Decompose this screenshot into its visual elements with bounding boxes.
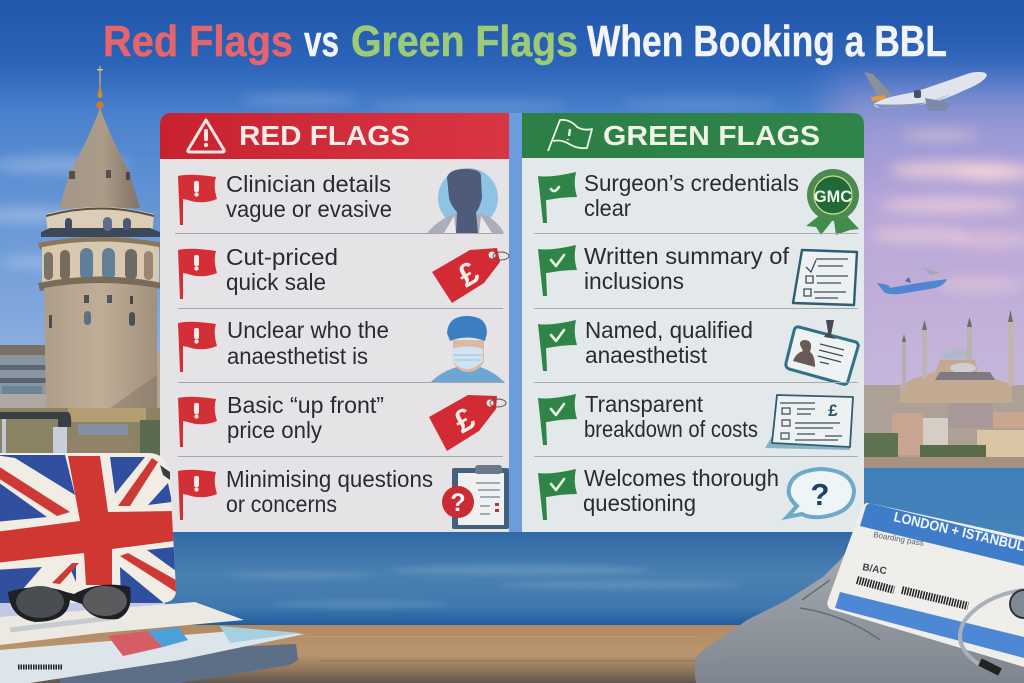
text: anaesthetist bbox=[585, 342, 708, 368]
green panel body bbox=[522, 150, 864, 532]
text: clear bbox=[584, 195, 631, 221]
icon: cost breakdown card bbox=[765, 395, 853, 450]
red panel body bbox=[160, 150, 509, 532]
title bbox=[103, 17, 947, 66]
icon: boarding pass bbox=[827, 503, 1024, 667]
suitcase side latch bbox=[160, 465, 170, 480]
text: Written summary of bbox=[584, 243, 790, 269]
icon: red flag bbox=[178, 249, 217, 299]
text bbox=[226, 466, 433, 517]
row divider bbox=[175, 233, 503, 234]
row: written summary bbox=[538, 243, 857, 305]
text bbox=[584, 391, 758, 442]
icon: sunglasses bbox=[8, 585, 131, 622]
row divider bbox=[534, 456, 858, 457]
scenery: left hillside buildings bbox=[0, 345, 162, 458]
text: Welcomes thorough bbox=[584, 465, 779, 491]
icon: red flag bbox=[178, 397, 217, 447]
tower window drum bbox=[42, 242, 159, 283]
tower cone roof bbox=[59, 108, 140, 208]
icon: green flag bbox=[538, 469, 577, 520]
text: quick sale bbox=[226, 269, 326, 295]
text: price only bbox=[227, 417, 322, 443]
row: minimising questions bbox=[178, 465, 509, 529]
panel gap strip bbox=[505, 113, 527, 532]
icon: GMC badge bbox=[806, 169, 859, 235]
text: Basic “up front” bbox=[227, 392, 384, 418]
table top bbox=[0, 625, 1024, 683]
icon: clipboard with question bbox=[442, 465, 509, 529]
icon: outline flag bbox=[548, 120, 592, 151]
icon: speech bubble bbox=[787, 469, 854, 517]
text: breakdown of costs bbox=[584, 416, 758, 442]
icon: red flag bbox=[178, 470, 217, 520]
background: right sea bbox=[860, 468, 1024, 628]
icon: price tag bbox=[432, 248, 509, 303]
text: anaesthetist is bbox=[227, 343, 368, 369]
text: Clinician details bbox=[226, 171, 391, 197]
icon: Union Jack suitcase bbox=[0, 412, 180, 605]
text: Transparent bbox=[585, 391, 704, 417]
text bbox=[585, 317, 753, 368]
row divider bbox=[534, 233, 858, 234]
icon: denim jeans bbox=[695, 540, 1024, 683]
boarding pass footer band bbox=[835, 592, 1024, 658]
icon: big plane bbox=[864, 72, 987, 111]
suitcase body bbox=[0, 450, 180, 605]
icon: Galata tower bbox=[38, 66, 163, 408]
skyline mosque bbox=[900, 310, 1014, 403]
red panel header bbox=[160, 113, 509, 159]
icon: stacked tickets bbox=[0, 602, 305, 683]
icon: cost breakdown card: £ bbox=[828, 401, 838, 420]
row: welcomes questioning bbox=[538, 465, 854, 520]
text: inclusions bbox=[584, 268, 684, 294]
text: or concerns bbox=[226, 491, 337, 517]
icon: red flag bbox=[178, 322, 217, 372]
icon: green flag bbox=[538, 245, 577, 296]
text: Unclear who the bbox=[227, 317, 389, 343]
icon: masked anaesthetist bbox=[430, 316, 505, 383]
row divider bbox=[178, 456, 503, 457]
icon: GMC badge: GMC bbox=[814, 187, 852, 206]
background: central sea bbox=[165, 532, 865, 626]
icon: clipboard with question: ? bbox=[450, 489, 466, 517]
icon: green flag bbox=[538, 320, 577, 371]
row: surgeon credentials bbox=[538, 169, 859, 235]
row: named anaesthetist bbox=[538, 317, 858, 384]
skyline city blocks bbox=[862, 385, 1024, 468]
row: clinician details bbox=[178, 168, 504, 233]
icon: anonymous clinician bbox=[427, 168, 504, 233]
text bbox=[584, 243, 790, 294]
tower upper gallery bbox=[38, 207, 163, 249]
text bbox=[226, 171, 392, 222]
icon: price tag: £ bbox=[452, 254, 485, 294]
icon: Istanbul skyline bbox=[862, 310, 1024, 468]
icon: small plane bbox=[877, 267, 947, 294]
panel: green flags bbox=[522, 113, 864, 532]
green heading: GREEN FLAGS bbox=[603, 120, 820, 151]
text bbox=[584, 170, 799, 221]
icon: warning triangle bbox=[188, 120, 224, 152]
green panel header bbox=[522, 113, 864, 158]
row divider bbox=[534, 308, 858, 309]
icon: boarding pass: B/AC bbox=[861, 562, 887, 577]
tower stone base bbox=[44, 283, 157, 408]
title: Green Flags bbox=[351, 17, 578, 66]
text: vague or evasive bbox=[226, 196, 392, 222]
title: When Booking a BBL bbox=[587, 17, 947, 66]
title: Red Flags bbox=[103, 17, 293, 66]
text bbox=[226, 244, 338, 295]
icon: red flag bbox=[178, 175, 217, 225]
row divider bbox=[178, 382, 503, 383]
text bbox=[583, 465, 779, 516]
title: vs bbox=[304, 17, 339, 66]
icon: ID card bbox=[786, 320, 858, 384]
tower finial bbox=[96, 66, 104, 109]
text bbox=[227, 317, 389, 369]
panel: red flags bbox=[160, 113, 509, 532]
icon: checklist bbox=[793, 250, 857, 305]
icon: green flag bbox=[538, 172, 577, 223]
text: Named, qualified bbox=[585, 317, 753, 343]
row divider bbox=[534, 382, 858, 383]
boarding pass header band bbox=[860, 503, 1024, 566]
row: cut-priced bbox=[178, 244, 509, 303]
text: questioning bbox=[583, 490, 696, 516]
icon: price tag bbox=[429, 395, 506, 451]
suitcase handle bbox=[0, 412, 71, 455]
text: Cut-priced bbox=[226, 244, 338, 270]
icon: green flag bbox=[538, 394, 577, 445]
row: unclear anaesthetist bbox=[178, 316, 505, 383]
tower lower cornice bbox=[38, 276, 162, 291]
row divider bbox=[178, 308, 503, 309]
text: Minimising questions bbox=[226, 466, 433, 492]
text bbox=[227, 392, 384, 443]
icon: speech bubble: ? bbox=[811, 477, 829, 512]
row: basic price bbox=[178, 392, 506, 451]
row: transparent breakdown bbox=[538, 391, 853, 450]
text: Surgeon’s credentials bbox=[584, 170, 799, 196]
icon: boarding pass: Boarding pass bbox=[873, 530, 925, 548]
icon: stethoscope bbox=[960, 590, 1024, 672]
red heading: RED FLAGS bbox=[239, 120, 410, 151]
icon: price tag: £ bbox=[448, 400, 481, 440]
